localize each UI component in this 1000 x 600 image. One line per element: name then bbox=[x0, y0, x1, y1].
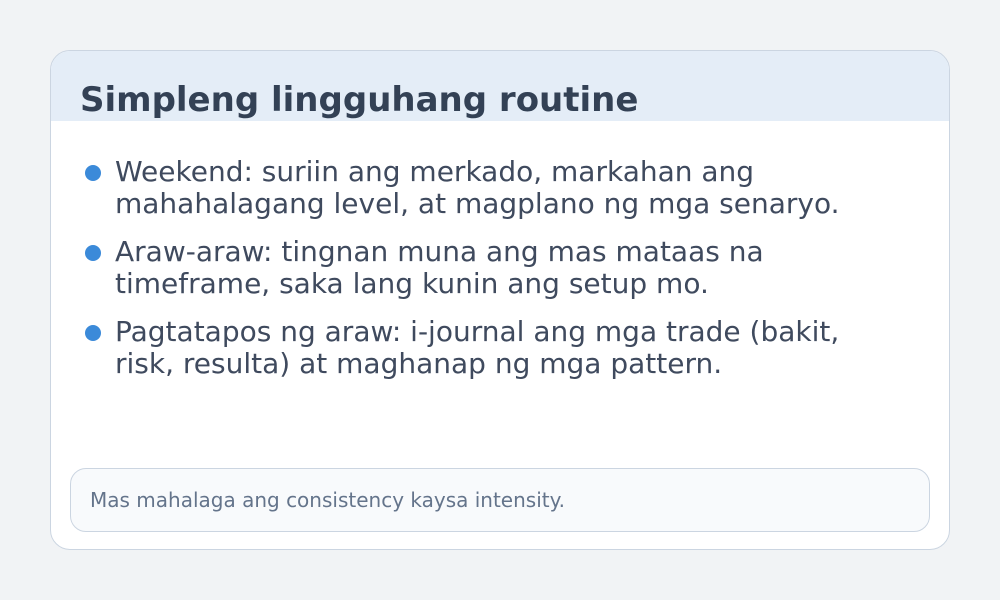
bullet 1: Weekend: suriin ang merkado, markahan ang mahahalagang level, at magplano ng mga senaryo. bbox=[115, 155, 840, 220]
header band bbox=[50, 50, 950, 121]
bullet 3: Pagtatapos ng araw: i-journal ang mga trade (bakit, risk, resulta) at maghanap ng mga pattern. bbox=[115, 315, 839, 380]
footer callout: Mas mahalaga ang consistency kaysa intensity. bbox=[90, 488, 565, 512]
bullet 2: Araw-araw: tingnan muna ang mas mataas na timeframe, saka lang kunin ang setup mo. bbox=[115, 235, 764, 300]
footer callout bbox=[70, 468, 930, 532]
title: Simpleng lingguhang routine bbox=[80, 80, 638, 120]
card bbox=[50, 50, 950, 550]
